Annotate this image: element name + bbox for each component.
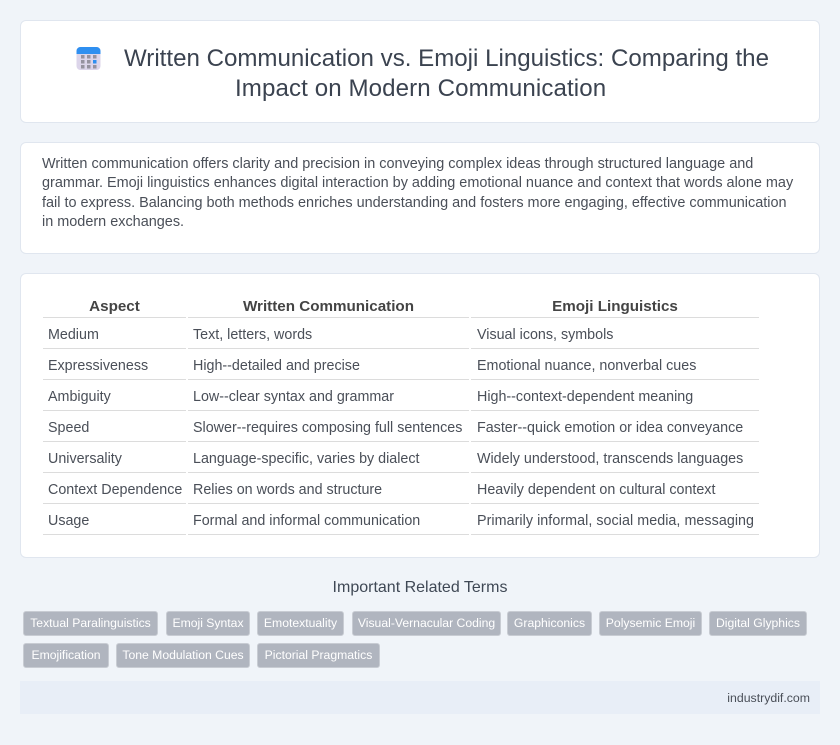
tag [257,643,380,668]
intro text: grammar. Emoji linguistics enhances digital interaction by adding emotional nuance and context that words alone may [42,175,793,191]
icon: calendar [76,47,100,70]
row: universality: Universality [48,451,122,467]
tag: Pictorial Pragmatics [265,648,372,662]
panel: header [20,20,820,123]
row: context dependence: Relies on words and structure [193,482,382,498]
tag: Visual-Vernacular Coding [358,616,495,630]
row: expressiveness: Expressiveness [48,358,148,374]
row: speed [43,420,759,442]
heading: related terms: Important Related Terms [333,579,507,596]
tag [709,611,807,636]
row: ambiguity: Low--clear syntax and grammar [193,389,394,405]
table header: Emoji Linguistics [552,298,678,315]
row: context dependence [43,482,759,504]
row: speed: Speed [48,420,89,436]
tag [257,611,344,636]
tag [23,643,109,668]
tag [23,611,158,636]
related term tags [23,611,807,668]
row: expressiveness [43,358,759,380]
tag: Emotextuality [264,616,337,630]
tag: Tone Modulation Cues [122,648,244,662]
tag: Textual Paralinguistics [30,616,151,630]
row: universality: Widely understood, transcends languages [477,451,743,467]
tag: Emojification [31,648,101,662]
table header: Aspect [89,298,140,315]
row: ambiguity: Ambiguity [48,389,111,405]
panel: introduction [20,142,820,254]
footer source: industrydif.com [727,690,810,704]
row: context dependence: Heavily dependent on cultural context [477,482,715,498]
intro text: fail to express. Balancing both methods enriches understanding and fosters more engaging, effective communication [42,194,787,210]
tag [166,611,250,636]
panel: comparison table [20,273,820,558]
row: universality [43,451,759,473]
row: speed: Slower--requires composing full sentences [193,420,462,436]
table header [43,298,759,318]
tag [599,611,702,636]
row: universality: Language-specific, varies by dialect [193,451,420,467]
row: expressiveness: High--detailed and precise [193,358,360,374]
tag: Graphiconics [514,616,585,630]
row: context dependence: Context Dependence [48,482,182,498]
row: medium: Medium [48,327,99,343]
tag: Emoji Syntax [172,616,244,630]
title: Written Communication vs. Emoji Linguistics: Comparing the [124,44,769,72]
intro text: in modern exchanges. [42,214,184,230]
row: usage [43,513,759,535]
row: ambiguity [43,389,759,411]
title [124,44,769,102]
tag [352,611,501,636]
title: Impact on Modern Communication [235,74,606,102]
tag [507,611,592,636]
row: usage: Usage [48,513,89,529]
tag: Digital Glyphics [716,616,800,630]
row: medium [43,327,759,349]
row: medium: Visual icons, symbols [477,327,613,343]
row: usage: Formal and informal communication [193,513,420,529]
footer bar [20,681,820,714]
intro text [42,156,794,230]
row: medium: Text, letters, words [193,327,312,343]
row: speed: Faster--quick emotion or idea conveyance [477,420,743,436]
table header: Written Communication [243,298,414,315]
row: ambiguity: High--context-dependent meaning [477,389,693,405]
row: expressiveness: Emotional nuance, nonverbal cues [477,358,696,374]
tag: Polysemic Emoji [606,616,695,630]
tag [116,643,250,668]
intro text: Written communication offers clarity and precision in conveying complex ideas through structured language and [42,156,753,172]
row: usage: Primarily informal, social media, messaging [477,513,754,529]
